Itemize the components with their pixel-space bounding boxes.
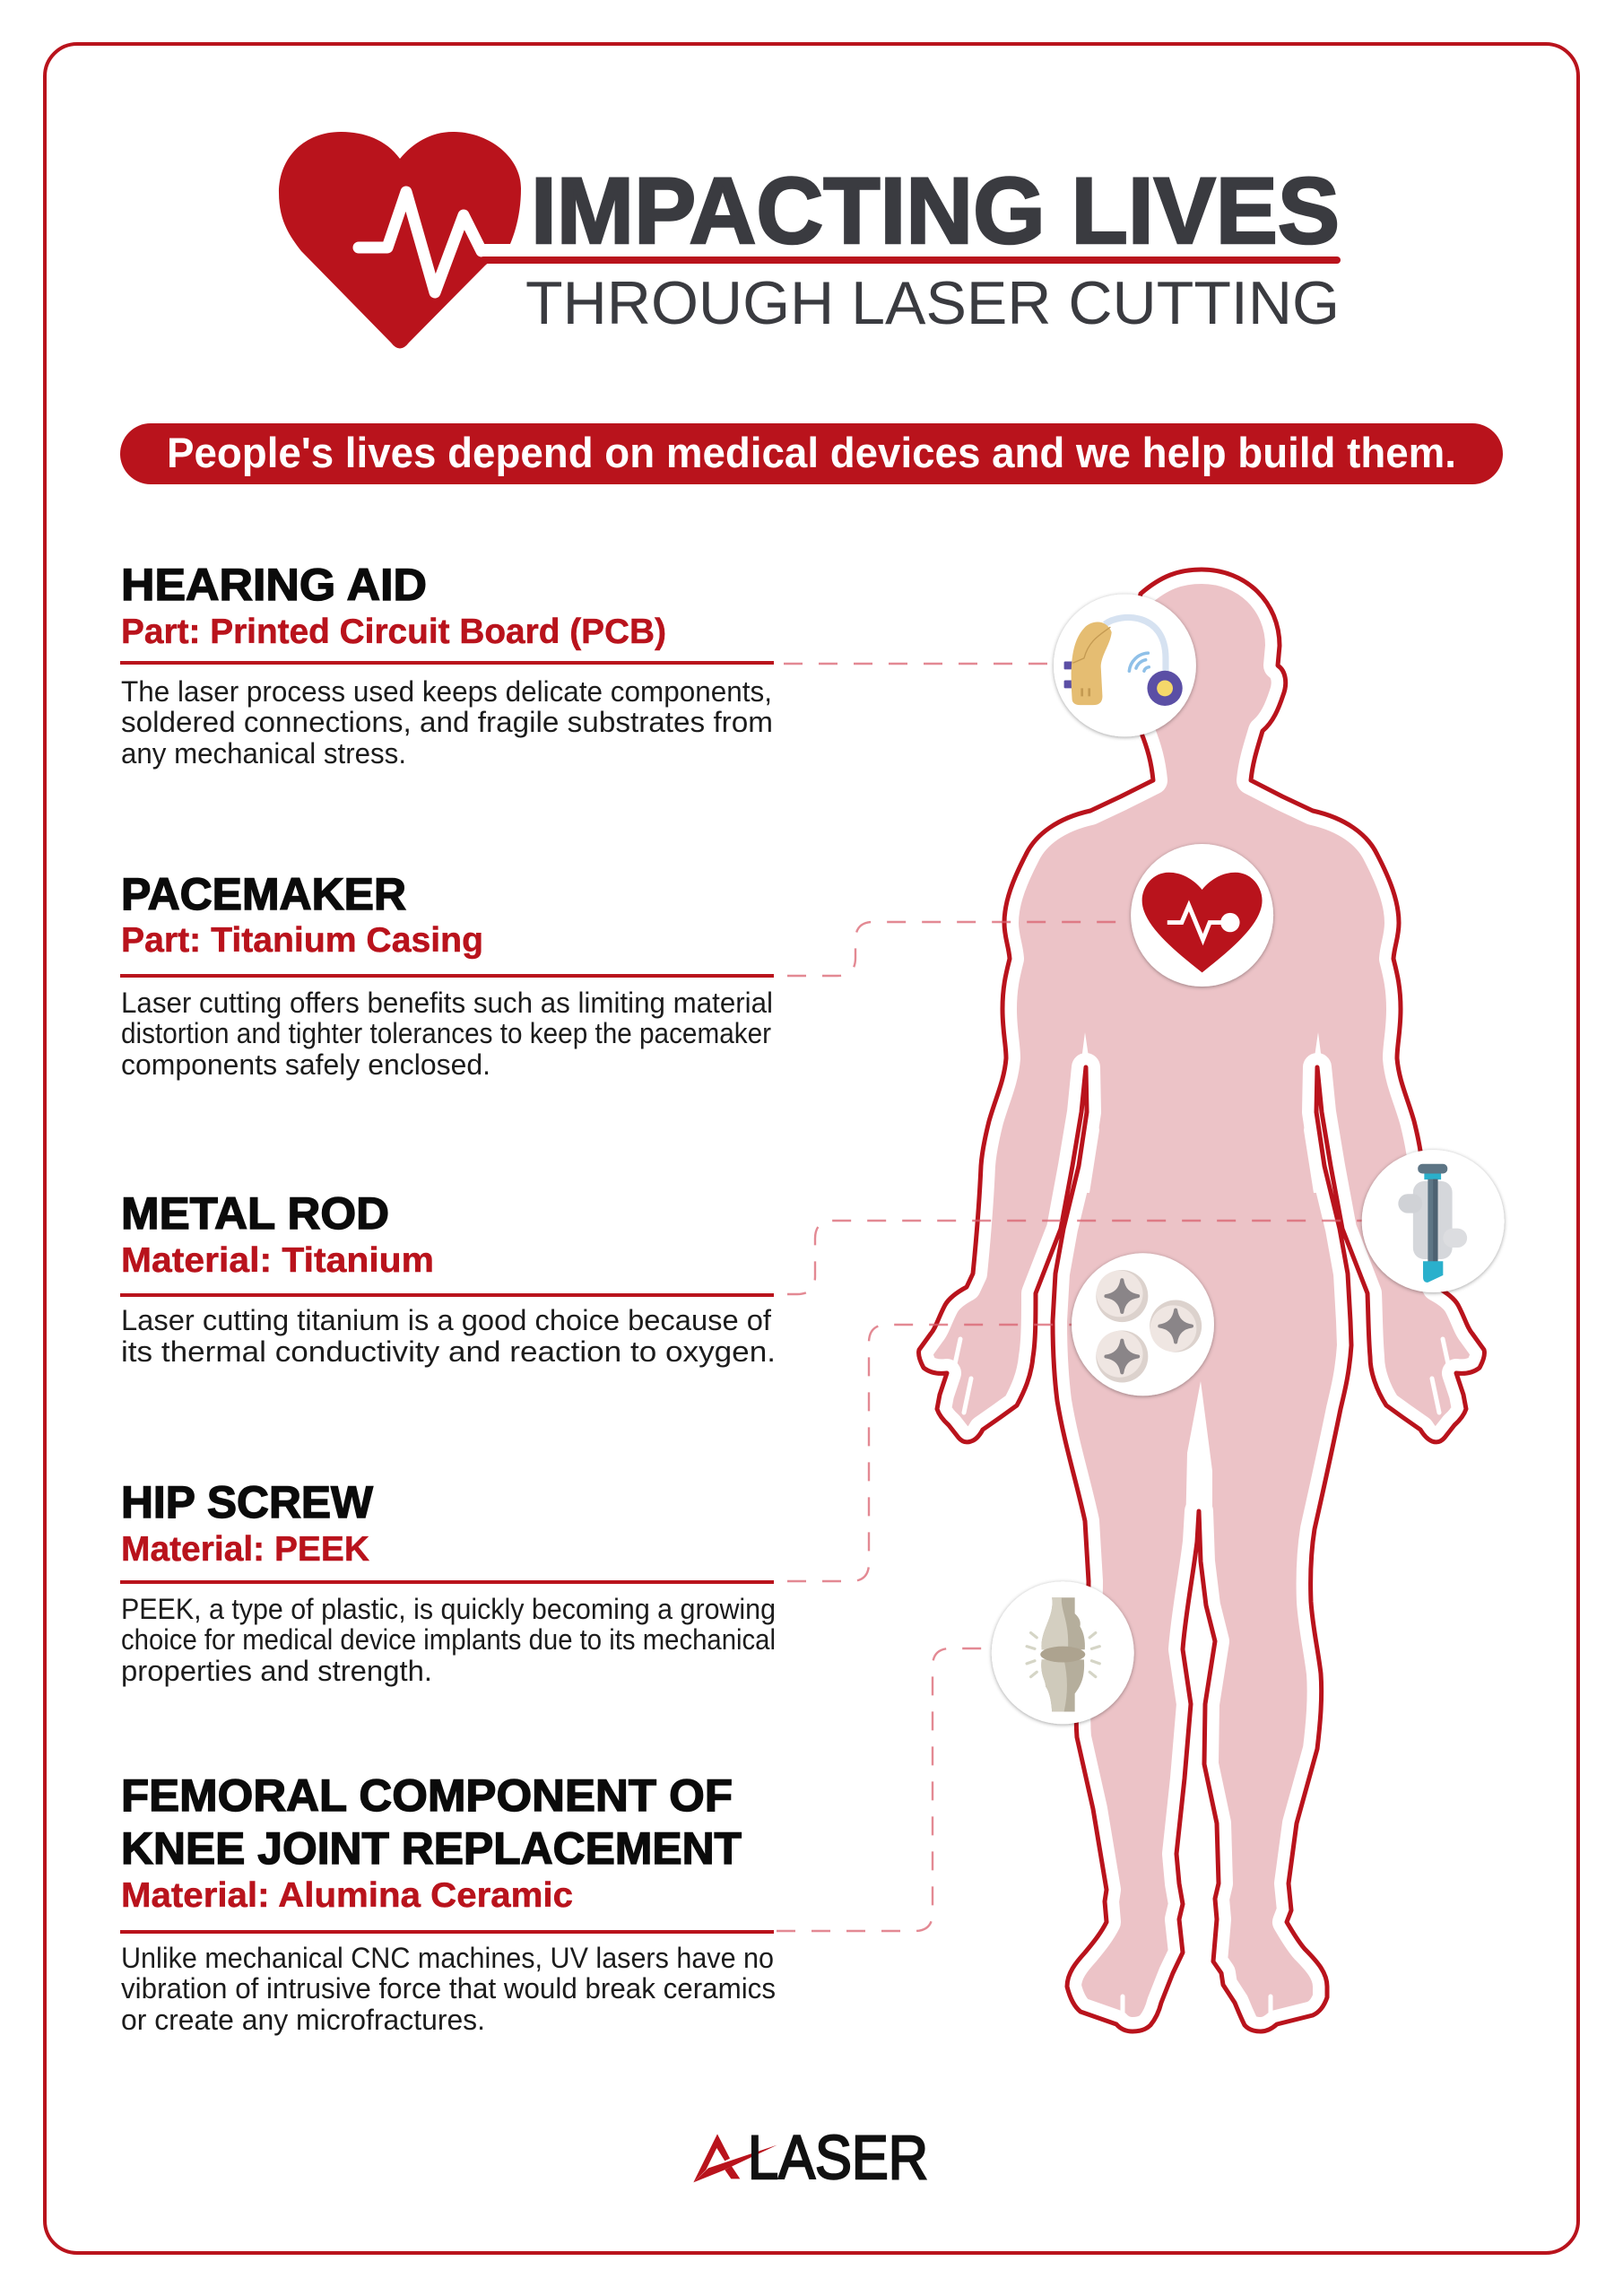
description: its thermal conductivity and reaction to oxygen. — [121, 1335, 776, 1368]
description: properties and strength. — [121, 1655, 432, 1687]
heading: PACEMAKER — [121, 869, 406, 919]
heading: METAL ROD — [121, 1188, 389, 1239]
description — [121, 1942, 776, 2036]
description: Laser cutting offers benefits such as limiting material — [121, 987, 773, 1019]
description: Unlike mechanical CNC machines, UV lasers have no — [121, 1942, 774, 1974]
icon: hearing aid — [1054, 594, 1196, 736]
logo wordmark: LASER — [748, 2123, 928, 2192]
description: any mechanical stress. — [121, 737, 406, 770]
material label: Material: PEEK — [121, 1530, 369, 1569]
connector lines — [777, 664, 1363, 1931]
icon: metal rod — [1362, 1150, 1505, 1292]
description — [121, 675, 773, 770]
body figure — [919, 570, 1484, 2031]
section: hearing aid — [120, 560, 774, 770]
description — [121, 987, 773, 1081]
description: components safely enclosed. — [121, 1048, 490, 1081]
icon: heart with pulse — [279, 132, 1341, 348]
material label: Material: Titanium — [121, 1241, 434, 1280]
section: metal rod — [120, 1188, 776, 1368]
material label: Material: Alumina Ceramic — [121, 1876, 573, 1915]
description: soldered connections, and fragile substrates from — [121, 706, 773, 738]
logo — [693, 2123, 928, 2192]
main title: IMPACTING LIVES — [531, 159, 1340, 264]
part label: Part: Titanium Casing — [121, 921, 483, 960]
section: hip screw — [120, 1477, 776, 1687]
banner: People's lives depend on medical devices and we help build them. — [167, 429, 1456, 476]
description: distortion and tighter tolerances to keep the pacemaker — [121, 1017, 771, 1049]
description — [121, 1304, 776, 1368]
logo mark — [693, 2134, 777, 2182]
part label: Part: Printed Circuit Board (PCB) — [121, 613, 666, 651]
heading: FEMORAL COMPONENT OF — [121, 1770, 733, 1821]
section: pacemaker — [120, 869, 774, 1081]
description: Laser cutting titanium is a good choice because of — [121, 1304, 771, 1336]
heading: HIP SCREW — [121, 1477, 374, 1527]
description: PEEK, a type of plastic, is quickly becoming a growing — [121, 1593, 776, 1625]
heading: KNEE JOINT REPLACEMENT — [121, 1823, 742, 1874]
icon: hip screws — [1072, 1253, 1214, 1396]
description: or create any microfractures. — [121, 2004, 485, 2036]
heading — [121, 1770, 742, 1874]
description: choice for medical device implants due to its mechanical — [121, 1623, 776, 1656]
section: femoral component — [120, 1770, 776, 2036]
description — [121, 1593, 776, 1687]
icon: pacemaker heart — [1131, 844, 1273, 987]
icon: knee joint — [992, 1581, 1134, 1724]
title block — [279, 132, 1341, 348]
subtitle: THROUGH LASER CUTTING — [525, 269, 1340, 337]
description: The laser process used keeps delicate components, — [121, 675, 772, 708]
heading: HEARING AID — [121, 560, 427, 610]
description: vibration of intrusive force that would break ceramics — [121, 1972, 776, 2005]
